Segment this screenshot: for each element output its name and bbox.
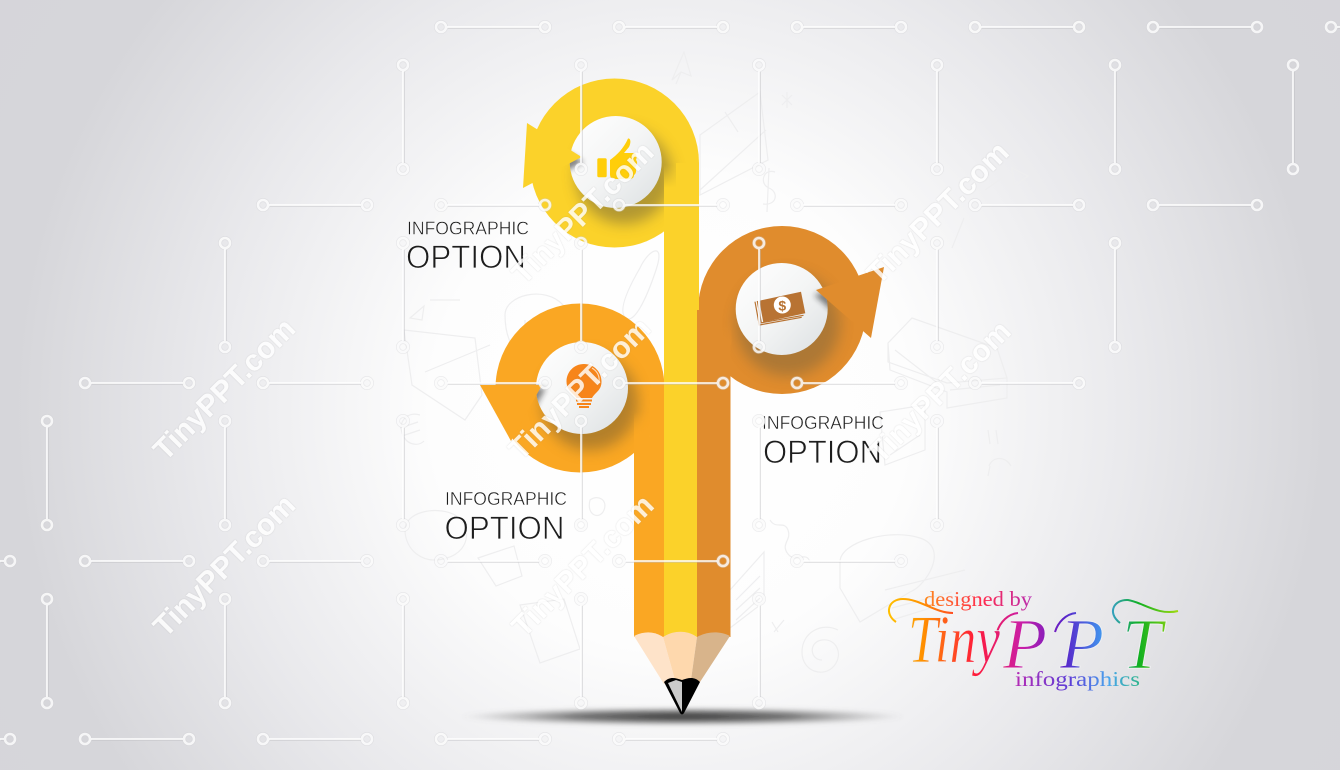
pencil body: yellow stem [664, 163, 699, 637]
pencil body: orange stem [634, 388, 664, 637]
text: right option: OPTION [763, 434, 882, 470]
right dark orange spiral ring [698, 226, 866, 394]
logo: designed by TinyPPT infographics [889, 587, 1178, 691]
icon: thumbs up [597, 138, 637, 179]
TinyPPT watermarks: TinyPPT.com [147, 489, 302, 644]
left orange spiral ring [496, 304, 664, 472]
top arrowhead [523, 123, 584, 193]
text: top option: OPTION [406, 239, 526, 275]
faint background doodles [400, 52, 1028, 672]
TinyPPT watermarks: TinyPPT.com [863, 315, 1018, 470]
TinyPPT watermarks [147, 136, 1018, 644]
text: right option [762, 412, 884, 470]
TinyPPT watermarks: TinyPPT.com [506, 489, 661, 644]
text: left option: INFOGRAPHIC [445, 488, 567, 509]
TinyPPT watermarks: TinyPPT.com [506, 136, 661, 291]
logo: designed by TinyPPT infographics: Tiny [908, 601, 1001, 677]
text: top option: INFOGRAPHIC [407, 218, 529, 238]
pencil body: dark orange stem [697, 310, 732, 637]
text: left option: OPTION [444, 510, 564, 546]
logo: designed by TinyPPT infographics: PPT [1002, 604, 1167, 684]
right disc with money icon [736, 263, 828, 355]
right arrowhead [814, 267, 884, 343]
ground shadow [461, 707, 905, 726]
top yellow spiral ring [530, 78, 699, 248]
TinyPPT watermarks: TinyPPT.com [503, 312, 658, 467]
pencil infographic [480, 78, 884, 714]
logo: designed by TinyPPT infographics: infographics [1015, 667, 1140, 691]
pencil wood tip [634, 632, 730, 684]
left disc with bulb icon [536, 342, 628, 434]
left arrowhead [480, 385, 546, 444]
text: left option [444, 488, 567, 546]
TinyPPT watermarks: TinyPPT.com [147, 312, 302, 467]
top disc with thumb icon [570, 116, 662, 208]
icon: light bulb [566, 364, 602, 408]
icon: cash stack: $ [778, 298, 786, 314]
text: top option [406, 218, 529, 275]
pencil graphite tip [664, 678, 700, 714]
text: right option: INFOGRAPHIC [762, 412, 884, 433]
TinyPPT watermarks: TinyPPT.com [861, 136, 1016, 291]
logo: designed by TinyPPT infographics: designed by [924, 587, 1033, 611]
